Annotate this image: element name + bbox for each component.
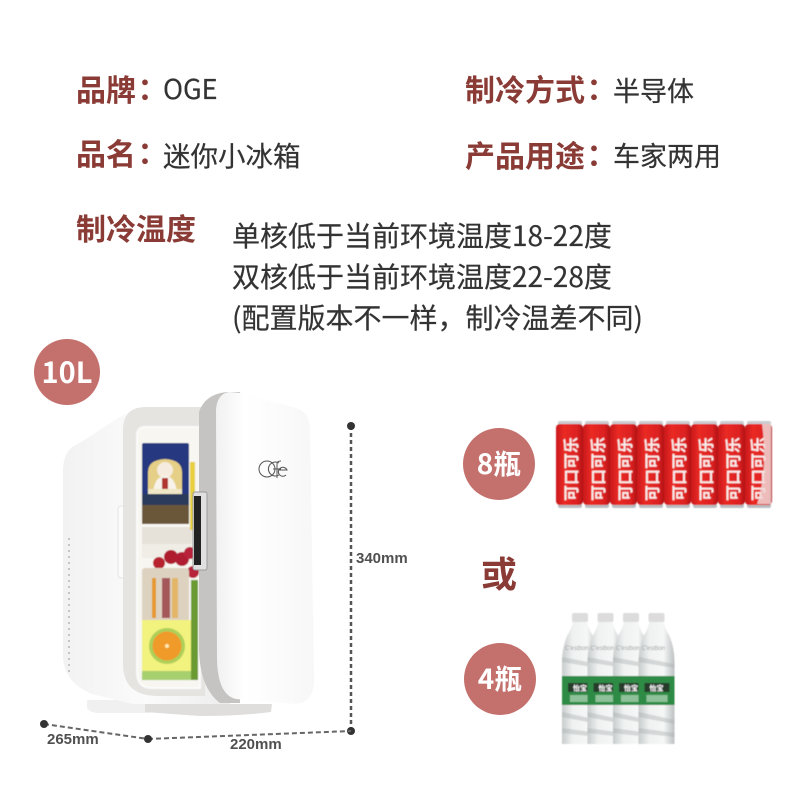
spec: product use: ： xyxy=(579,132,609,176)
badge: 4 bottles xyxy=(464,643,536,715)
row of 8 cola cans: 可口可乐 xyxy=(693,437,717,501)
row of 4 water bottles: 怡宝 xyxy=(624,684,638,694)
spec: product name: 迷你小冰箱 xyxy=(163,134,300,174)
spec: product name: 品名 xyxy=(76,130,136,174)
door handle xyxy=(193,492,207,570)
connector word: or: 或 xyxy=(481,546,517,598)
vent dots xyxy=(68,538,70,672)
dimension: depth 265mm xyxy=(40,720,152,748)
row of 4 water bottles: 怡宝 xyxy=(650,684,664,694)
row of 8 cola cans: 可口可乐 xyxy=(639,437,663,501)
badge: 8 bottles xyxy=(463,428,535,500)
spec: product use: 产品用途 xyxy=(465,132,585,176)
text block: cooling temperature details xyxy=(232,215,643,337)
row of 4 water bottles: C'estbon xyxy=(616,646,640,652)
text block: cooling temperature details: 双核低于当前环境温度22-28度 xyxy=(232,256,612,296)
spec: cooling method: 半导体 xyxy=(613,70,694,109)
door xyxy=(193,392,314,704)
dimension: width 220mm: 220mm xyxy=(230,736,282,753)
fridge base xyxy=(87,700,150,713)
heading: cooling temperature: 制冷温度 xyxy=(76,205,196,249)
row of 4 water bottles: 怡宝 xyxy=(598,684,612,694)
dimension: depth 265mm: 265mm xyxy=(47,731,99,748)
row of 4 water bottles xyxy=(562,613,674,744)
row of 8 cola cans: 可口可乐 xyxy=(558,437,582,501)
text block: cooling temperature details: (配置版本不一样，制冷温差不同) xyxy=(232,297,643,337)
interior xyxy=(137,427,200,688)
spec: brand xyxy=(76,66,218,110)
row of 4 water bottles: 怡宝 xyxy=(573,684,587,694)
row of 4 water bottles: C'estbon xyxy=(590,646,615,652)
fridge body xyxy=(63,412,230,704)
row of 4 water bottles: C'estbon xyxy=(642,646,666,652)
spec: product use: 车家两用 xyxy=(613,135,721,174)
row of 8 cola cans xyxy=(556,421,772,508)
fridge illustration xyxy=(63,392,314,716)
spec: brand: 品牌 xyxy=(76,66,136,110)
row of 8 cola cans: 可口可乐 xyxy=(720,437,744,501)
spec: cooling method xyxy=(465,66,694,110)
row of 8 cola cans: 可口可乐 xyxy=(745,437,769,501)
spec: product use xyxy=(465,132,721,176)
spec: product name: ： xyxy=(130,130,160,174)
row of 8 cola cans: 可口可乐 xyxy=(612,437,636,501)
dimension: height 340mm: 340mm xyxy=(356,550,408,567)
row of 8 cola cans: 可口可乐 xyxy=(666,437,690,501)
base shadow xyxy=(145,704,272,716)
badge: 10L xyxy=(34,339,100,405)
spec: product name xyxy=(76,130,300,174)
spec: cooling method: ： xyxy=(579,66,609,110)
badge: 8 bottles: 8瓶 xyxy=(477,443,521,483)
row of 8 cola cans: 可口可乐 xyxy=(585,437,609,501)
badge: 10L: 10L xyxy=(42,350,92,392)
fridge front frame xyxy=(123,407,205,696)
text block: cooling temperature details: 单核低于当前环境温度18-22度 xyxy=(232,215,612,255)
spec: brand: ： xyxy=(130,66,160,110)
side latch xyxy=(118,506,125,578)
spec: brand: OGE xyxy=(163,68,218,107)
dimension: height 340mm xyxy=(347,422,408,735)
badge: 4 bottles: 4瓶 xyxy=(478,658,522,698)
spec: cooling method: 制冷方式 xyxy=(465,66,585,110)
row of 4 water bottles: C'estbon xyxy=(565,646,589,652)
dimension: width 220mm xyxy=(148,731,351,753)
logo xyxy=(259,461,287,478)
